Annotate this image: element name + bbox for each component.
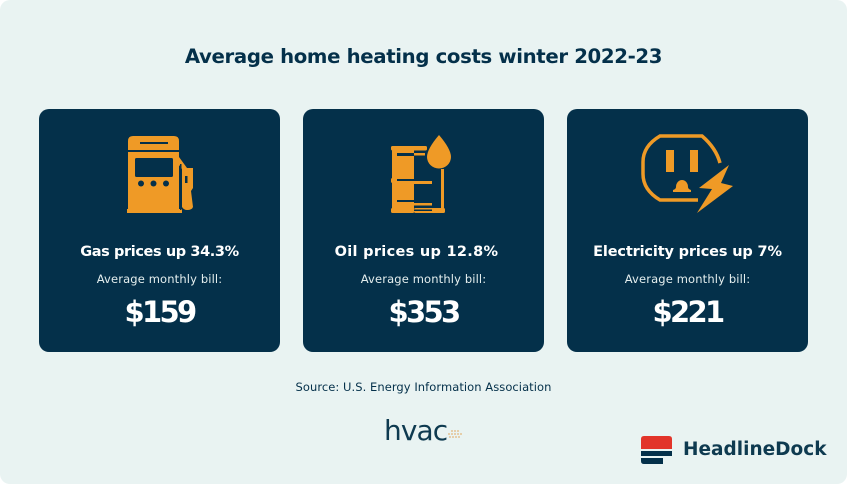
- value: electricity bill: $221: [653, 295, 722, 329]
- logo: hvac: hvac: [384, 414, 447, 447]
- icon: gas pump: [127, 136, 193, 213]
- heading: oil: Oil prices up 12.8%: [335, 244, 498, 260]
- label: electricity bill: Average monthly bill:: [625, 272, 750, 286]
- icon: HeadlineDock mark: [641, 436, 672, 464]
- value: oil bill: $353: [389, 295, 458, 329]
- panel: electricity: [567, 109, 808, 352]
- label: oil bill: Average monthly bill:: [361, 272, 486, 286]
- title: Average home heating costs winter 2022-23: [185, 45, 662, 68]
- icon: oil barrel and drop: [391, 135, 451, 213]
- heading: electricity: Electricity prices up 7%: [593, 244, 782, 260]
- wordmark: HeadlineDock: [683, 439, 826, 460]
- icon: outlet and bolt: [641, 134, 733, 213]
- panel: gas: [39, 109, 280, 352]
- source text: Source: U.S. Energy Information Association: [296, 380, 551, 394]
- value: gas bill: $159: [125, 295, 194, 329]
- panel: oil: [303, 109, 544, 352]
- label: gas bill: Average monthly bill:: [97, 272, 222, 286]
- logo: HeadlineDock: [641, 436, 827, 464]
- heading: gas: Gas prices up 34.3%: [80, 244, 239, 260]
